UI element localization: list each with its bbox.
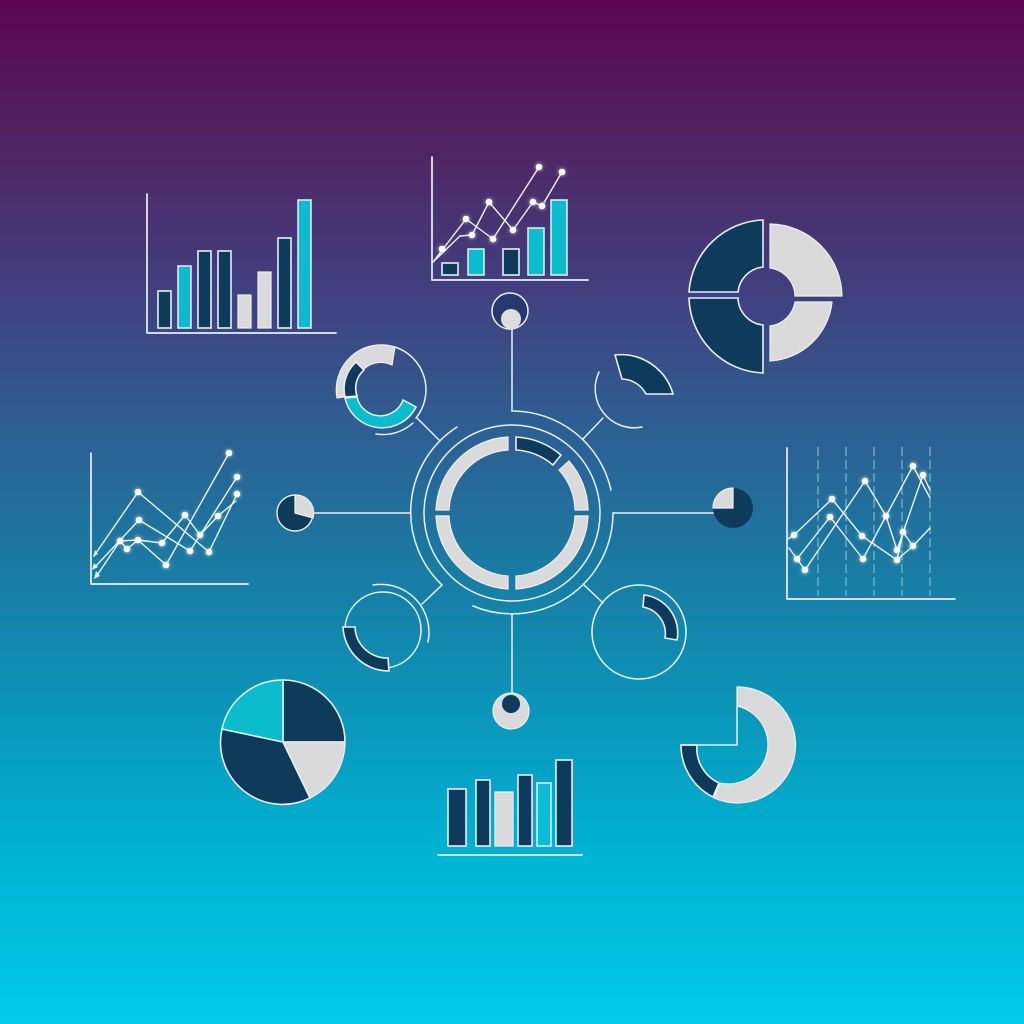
chart: pie bottom left	[221, 680, 345, 804]
chart: bar and line combo top centre	[432, 157, 588, 280]
trend lines	[94, 453, 237, 577]
node: bottom	[493, 693, 529, 729]
chart: ring chart bottom right	[681, 687, 796, 803]
trend lines	[433, 167, 562, 262]
satellite gauge: lower right	[592, 585, 686, 679]
arrow tips	[92, 550, 100, 579]
chart: line chart left	[91, 450, 248, 584]
satellite gauge: upper left	[336, 345, 426, 435]
chart: line chart right with dashed gridlines	[787, 447, 955, 599]
central hub ring	[424, 425, 600, 601]
chart: bar chart top left	[147, 194, 336, 333]
bars	[448, 760, 572, 846]
node: left pie	[277, 495, 314, 531]
axes	[432, 157, 588, 280]
satellite gauge: upper right	[595, 355, 673, 428]
axes	[787, 448, 955, 599]
chart: segmented donut top right	[689, 220, 842, 373]
thin ring	[424, 425, 600, 601]
connector lines from hub to nodes	[315, 328, 714, 694]
node: top	[492, 293, 528, 329]
trend lines	[788, 466, 930, 570]
axes	[147, 194, 336, 333]
data points	[439, 164, 565, 252]
satellite gauge: lower left	[343, 584, 429, 671]
node: right pie	[713, 488, 753, 528]
data points	[117, 450, 240, 568]
ring segments	[436, 437, 508, 510]
bars	[442, 200, 567, 275]
baseline	[438, 854, 582, 856]
data points	[791, 463, 926, 573]
chart: bar chart bottom centre	[438, 760, 582, 855]
axes	[91, 453, 248, 584]
bars	[158, 200, 311, 328]
